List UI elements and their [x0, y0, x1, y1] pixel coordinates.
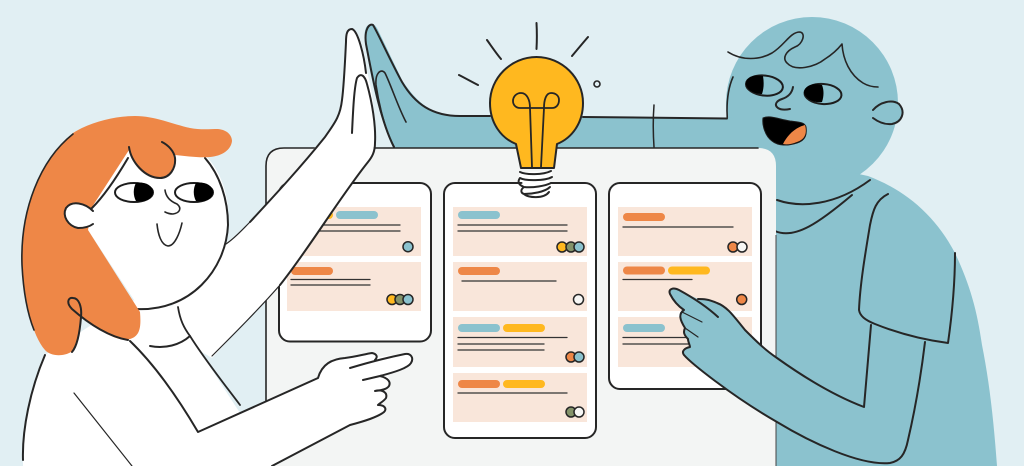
finger	[376, 71, 406, 147]
man: pointing arm	[670, 289, 925, 466]
icon: light bulb	[459, 23, 600, 198]
icon: ear	[873, 102, 903, 124]
bulb rays	[459, 23, 588, 85]
bulb screw base	[519, 171, 552, 198]
left eye	[745, 74, 784, 97]
bulb filament	[513, 93, 559, 167]
hair	[728, 32, 878, 87]
woman: face	[70, 140, 228, 309]
torso crease	[74, 393, 132, 466]
collar	[150, 336, 190, 347]
collar	[775, 180, 870, 233]
sleeve	[859, 194, 955, 343]
head outline	[727, 77, 733, 147]
right eye	[175, 183, 213, 202]
nose	[165, 190, 180, 214]
mouth	[763, 117, 806, 145]
woman: body and pointing arm	[23, 300, 412, 466]
hair curl	[68, 298, 128, 352]
elbow line	[652, 105, 655, 147]
card: column 3	[609, 183, 761, 389]
card: column 1	[279, 183, 431, 342]
board	[266, 148, 776, 466]
right eye	[804, 83, 842, 105]
left eye	[115, 183, 153, 202]
woman: raised arm and hand	[170, 29, 375, 358]
icon: ear	[65, 203, 93, 228]
woman: hair	[22, 116, 232, 355]
finger	[280, 75, 375, 285]
man: raised arm and hand	[365, 24, 740, 150]
bulb spark	[594, 81, 600, 87]
man: body and head	[726, 17, 997, 466]
card: column 2	[444, 183, 596, 438]
nose	[776, 87, 793, 110]
mouth	[157, 223, 182, 246]
